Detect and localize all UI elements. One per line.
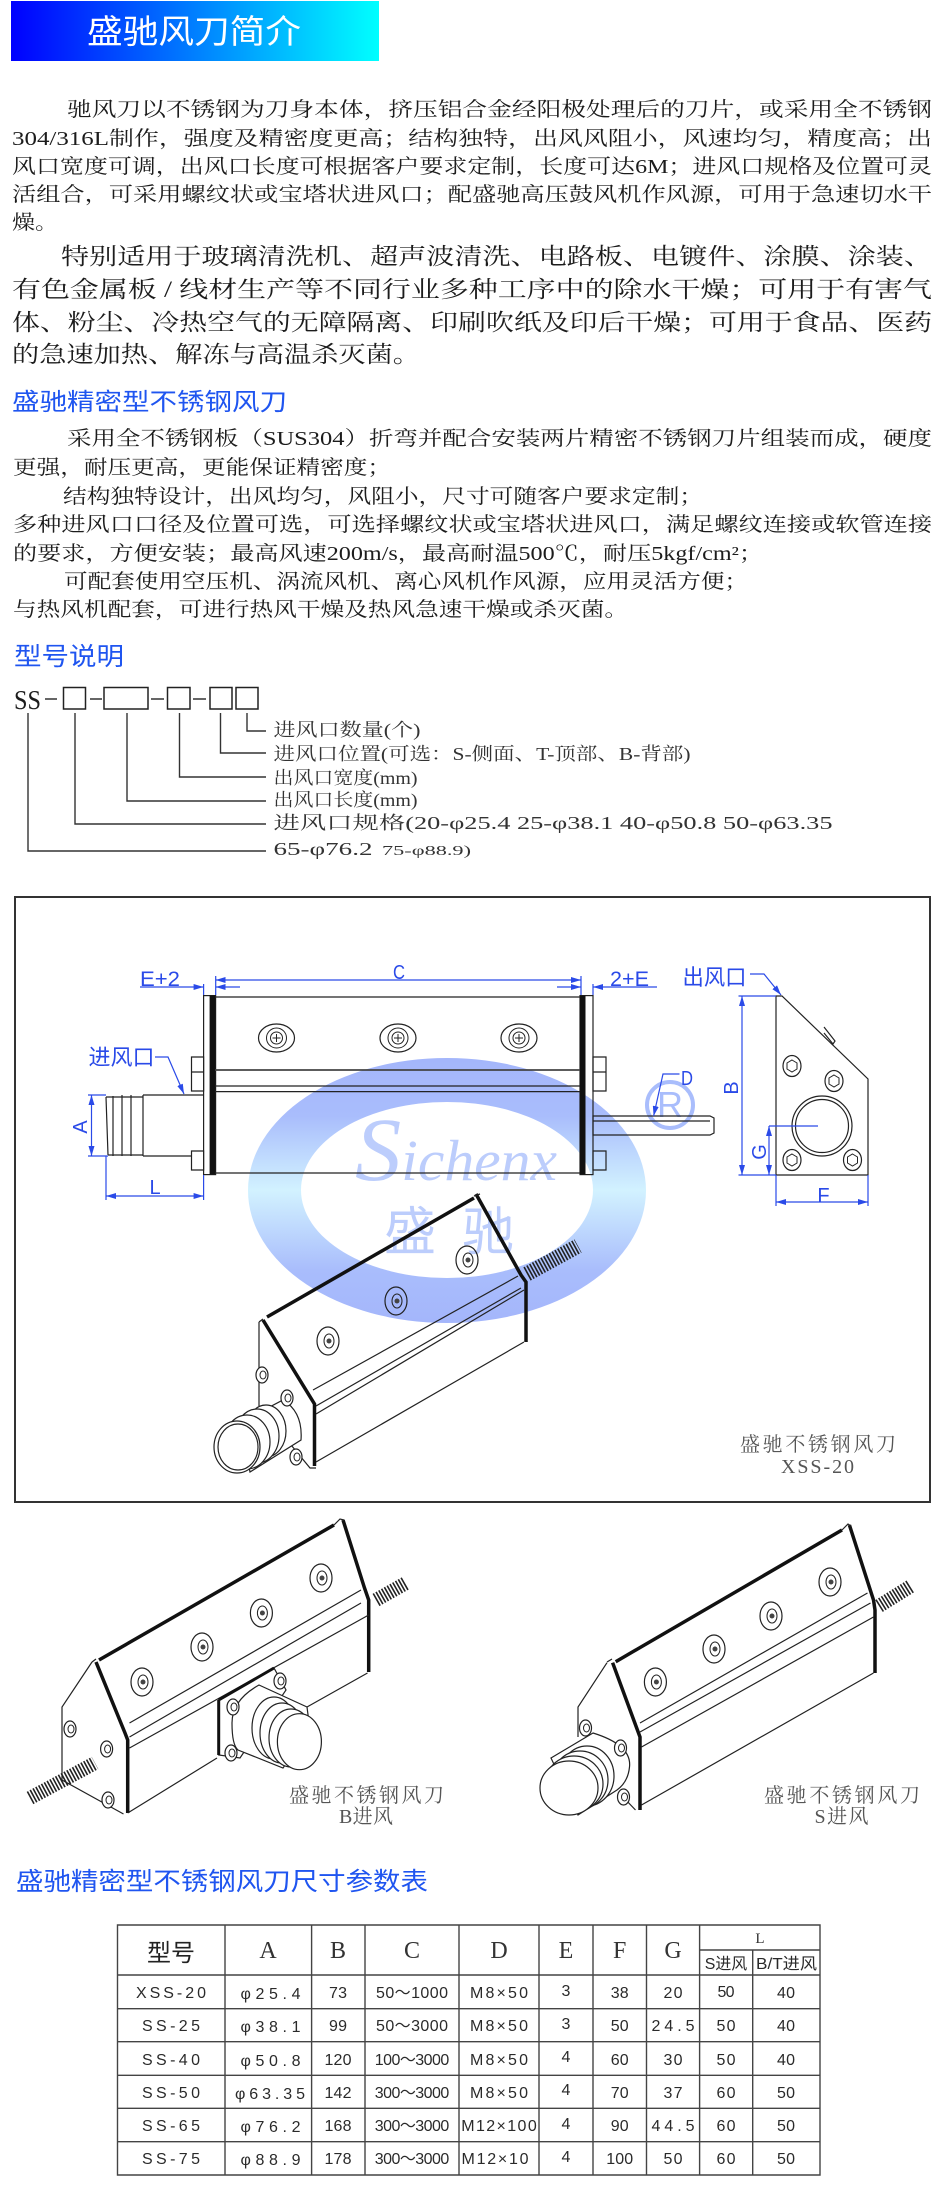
blue dimension lines and labels: L (149, 1177, 161, 1199)
model code diagram: 出风口宽度(mm) (274, 768, 418, 789)
table row: SS-25: 50 (716, 2018, 736, 2035)
table row: SS-50: 50 (777, 2085, 795, 2102)
table row: SS-40: 40 (777, 2052, 795, 2069)
table row: XSS-20: 38 (611, 1985, 629, 2002)
table row: SS-25: 24.5 (652, 2018, 695, 2035)
caption: S inlet: 盛驰不锈钢风刀 (764, 1784, 920, 1807)
heading: model explanation: 型号说明 (14, 643, 124, 671)
table row: SS-65: 50 (777, 2118, 795, 2135)
panel: dimension drawing (15, 897, 930, 1502)
table header (147, 1931, 817, 1973)
table row: SS-65: 300～3000 (375, 2118, 449, 2135)
table row: XSS-20: M8×50 (470, 1985, 528, 2002)
model code diagram: 65-φ76.2 (274, 839, 372, 859)
table row: SS-75: 50 (777, 2151, 795, 2168)
table row: SS-40: φ50.8 (240, 2053, 301, 2070)
parameter table (118, 1925, 820, 2175)
precision type description: 可配套使用空压机、涡流风机、离心风机作风源，应用灵活方便； (64, 570, 748, 593)
table row: SS-50: 142 (324, 2085, 352, 2102)
blue dimension lines and labels (70, 962, 868, 1207)
precision type description: 与热风机配套，可进行热风干燥及热风急速干燥或杀灭菌。 (13, 598, 628, 621)
isometric view of air knife (214, 1194, 578, 1473)
intro paragraph 2: 体、粉尘、冷热空气的无障隔离、印刷吹纸及印后干燥；可用于食品、医药 (12, 310, 932, 335)
intro paragraph 1: 活组合，可采用螺纹状或宝塔状进风口；配盛驰高压鼓风机作风源，可用于急速切水干 (12, 183, 932, 206)
table row: SS-40: M8×50 (470, 2052, 528, 2069)
table header: S进风 (705, 1955, 747, 1973)
precision type description: 的要求，方便安装；最高风速200m/s，最高耐温500℃，耐压5kgf/cm²； (13, 542, 763, 565)
side view of air knife (776, 996, 868, 1175)
table row: SS-65: 168 (324, 2118, 352, 2135)
model code diagram: 进风口规格(20-φ25.4 25-φ38.1 40-φ50.8 50-φ63.35 (274, 813, 832, 834)
table header: A (259, 1938, 277, 1964)
blue dimension lines and labels: D (681, 1068, 693, 1090)
table row: SS-50: φ63.35 (235, 2086, 305, 2103)
table row: SS-40 (142, 2049, 795, 2070)
heading: precision type: 盛驰精密型不锈钢风刀 (12, 389, 287, 416)
table row: SS-50 (142, 2082, 795, 2103)
table row: XSS-20: 50～1000 (376, 1985, 448, 2002)
table row: SS-65: M12×100 (461, 2118, 537, 2135)
intro paragraph 1: 驰风刀以不锈钢为刀身本体，挤压铝合金经阳极处理后的刀片，或采用全不锈钢 (67, 98, 932, 121)
table row: SS-40: 120 (324, 2052, 352, 2069)
intro paragraph 2: 特别适用于玻璃清洗机、超声波清洗、电路板、电镀件、涂膜、涂装、 (61, 244, 932, 269)
table row: XSS-20 (136, 1983, 795, 2003)
table grid (118, 1925, 820, 2175)
table row: SS-40: 50 (716, 2052, 736, 2069)
table row: SS-75: 50 (664, 2151, 683, 2168)
intro paragraph 1: 304/316L制作，强度及精密度更高；结构独特，出风风阻小，风速均匀，精度高；出 (12, 127, 932, 150)
table row: SS-75: 300～3000 (375, 2151, 449, 2168)
model code diagram: 进风口位置(可选：S-侧面、T-顶部、B-背部) (274, 744, 690, 765)
precision type description: 更强，耐压更高，更能保证精密度； (13, 456, 391, 479)
table row: SS-65: φ76.2 (240, 2119, 301, 2136)
intro paragraph 2 (12, 244, 932, 367)
table row: SS-50: SS-50 (142, 2085, 200, 2102)
watermark logo: 盛驰 (384, 1190, 514, 1265)
table row: SS-75: M12×10 (462, 2151, 529, 2168)
watermark logo: R (657, 1084, 683, 1125)
table row: XSS-20: φ25.4 (240, 1986, 301, 2003)
title banner (11, 1, 379, 61)
table row: SS-40: 60 (611, 2052, 629, 2069)
table row: SS-75: 178 (324, 2151, 352, 2168)
table row: SS-65: 4 (562, 2116, 571, 2133)
precision type description: 采用全不锈钢板（SUS304）折弯并配合安装两片精密不锈钢刀片组装而成，硬度 (67, 427, 932, 450)
table row: SS-65: 90 (611, 2118, 629, 2135)
table row: SS-75: 4 (562, 2149, 571, 2166)
table row: SS-75: SS-75 (142, 2151, 200, 2168)
blue dimension lines and labels: C (393, 962, 405, 984)
table header: G (664, 1938, 682, 1964)
table row: SS-75: 60 (716, 2151, 736, 2168)
table row: SS-40: 4 (562, 2049, 571, 2066)
table header: C (404, 1938, 420, 1964)
intro paragraph 1 (12, 98, 932, 234)
caption: S inlet (764, 1784, 920, 1828)
caption: XSS-20 (740, 1433, 896, 1478)
table row: SS-65 (142, 2116, 795, 2136)
intro paragraph 1: 风口宽度可调，出风口长度可根据客户要求定制，长度可达6M；进风口规格及位置可灵 (12, 155, 932, 178)
intro paragraph 2: 有色金属板 / 线材生产等不同行业多种工序中的除水干燥；可用于有害气 (12, 277, 932, 302)
table header: B (330, 1938, 346, 1964)
watermark logo: Sichenx (355, 1101, 557, 1200)
blue dimension lines and labels: G (749, 1144, 771, 1160)
precision type description: 结构独特设计，出风均匀，风阻小，尺寸可随客户要求定制； (63, 485, 703, 508)
table header: F (613, 1938, 626, 1964)
table row: XSS-20: 20 (664, 1985, 683, 2002)
table row: SS-40: SS-40 (142, 2052, 200, 2069)
table row: SS-65: 60 (716, 2118, 736, 2135)
table header: B/T进风 (756, 1955, 817, 1973)
blue dimension lines and labels: A (70, 1120, 92, 1134)
table row: XSS-20: XSS-20 (136, 1985, 206, 2002)
model code diagram: 出风口长度(mm) (274, 790, 418, 811)
table row: SS-40: 100～3000 (375, 2052, 449, 2069)
table row: SS-65: SS-65 (142, 2118, 200, 2135)
caption: B inlet: 盛驰不锈钢风刀 (289, 1784, 444, 1807)
table row: XSS-20: 3 (562, 1983, 571, 2000)
table row: SS-40: 30 (664, 2052, 683, 2069)
blue dimension lines and labels: 出风口 (682, 965, 746, 990)
table header: E (559, 1938, 573, 1964)
model code diagram: 75-φ88.9) (382, 844, 472, 859)
table row: SS-25 (142, 2016, 795, 2036)
table row: SS-50: M8×50 (470, 2085, 528, 2102)
front view of air knife (106, 996, 714, 1175)
model code diagram: 进风口数量(个) (274, 720, 420, 741)
table header: 型号 (147, 1933, 195, 1968)
table row: SS-75: φ88.9 (240, 2152, 301, 2169)
table row: SS-50: 4 (562, 2082, 571, 2099)
blue dimension lines and labels: F (817, 1185, 830, 1207)
table header: L (755, 1931, 765, 1947)
table row: SS-25: M8×50 (470, 2018, 528, 2035)
title banner: 盛驰风刀简介 (87, 5, 301, 53)
caption: XSS-20: 盛驰不锈钢风刀 (740, 1433, 896, 1456)
table row: SS-25: 50 (611, 2018, 629, 2035)
table row: XSS-20: 50 (718, 1984, 735, 2001)
blue dimension lines and labels: 2+E (610, 968, 649, 991)
table row: XSS-20: 40 (777, 1985, 795, 2002)
caption: B inlet (289, 1784, 444, 1828)
intro paragraph 1: 燥。 (12, 211, 58, 234)
table row: SS-25: 99 (329, 2018, 347, 2035)
blue dimension lines and labels: 进风口 (88, 1045, 154, 1070)
table row: SS-25: 40 (777, 2018, 795, 2035)
precision type description: 多种进风口口径及位置可选，可选择螺纹状或宝塔状进风口，满足螺纹连接或软管连接 (13, 513, 933, 536)
table row: SS-25: φ38.1 (240, 2019, 301, 2036)
model code diagram (14, 685, 832, 859)
table header: D (490, 1938, 508, 1964)
table row: SS-25: 3 (562, 2016, 571, 2033)
intro paragraph 2: 的急速加热、解冻与高温杀灭菌。 (12, 342, 420, 367)
blue dimension lines and labels: B (721, 1081, 743, 1095)
table row: SS-75: 100 (606, 2151, 633, 2168)
table row: SS-65: 44.5 (652, 2118, 695, 2135)
product view: B inlet (30, 1519, 406, 1814)
table row: XSS-20: 73 (329, 1985, 347, 2002)
caption: XSS-20: XSS-20 (781, 1456, 854, 1478)
product view: S inlet (540, 1524, 911, 1815)
table row: SS-75 (142, 2149, 795, 2169)
heading: parameter table: 盛驰精密型不锈钢风刀尺寸参数表 (16, 1868, 428, 1896)
watermark logo (248, 1058, 693, 1323)
model code diagram: SS (14, 685, 41, 715)
table row: SS-50: 37 (664, 2085, 683, 2102)
precision type description (13, 427, 933, 621)
caption: S inlet: S进风 (814, 1805, 868, 1828)
table row: SS-50: 300～3000 (375, 2085, 449, 2102)
blue dimension lines and labels: E+2 (140, 968, 180, 991)
table row: SS-50: 60 (716, 2085, 736, 2102)
table row: SS-25: SS-25 (142, 2018, 200, 2035)
table row: SS-50: 70 (611, 2085, 629, 2102)
table row: SS-25: 50～3000 (376, 2018, 448, 2035)
caption: B inlet: B进风 (339, 1805, 393, 1828)
